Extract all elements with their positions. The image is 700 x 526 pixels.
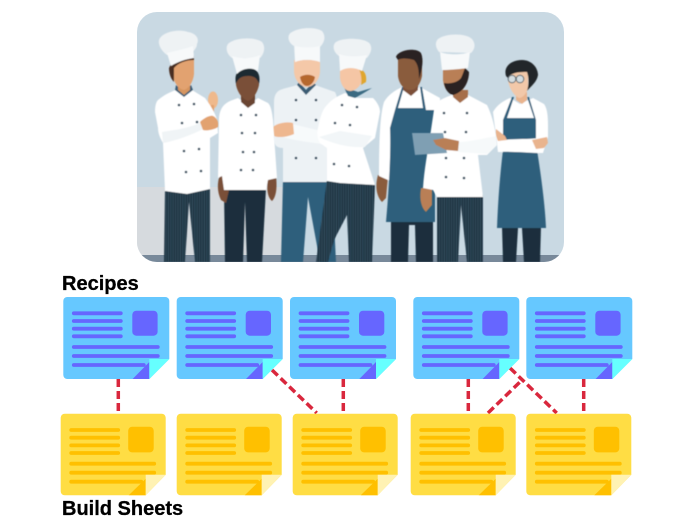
chef 3: bearded chef with crossed arms xyxy=(272,28,340,262)
build sheet 1 xyxy=(61,414,166,495)
build sheet 2 xyxy=(177,414,282,495)
build sheet 3 xyxy=(293,414,398,495)
chef 2: chef with arms at sides xyxy=(218,38,277,262)
wall background xyxy=(137,12,564,262)
build sheet 4 xyxy=(411,414,516,495)
heading: Recipes: Recipes xyxy=(62,273,139,295)
recipe card 3 xyxy=(290,297,396,379)
chef 5: cook in blue apron xyxy=(376,50,440,262)
chef 1: chef holding a wooden spoon xyxy=(155,31,218,262)
connector lines between recipes and build sheets xyxy=(118,368,584,413)
chef 6: bearded chef holding a tablet xyxy=(412,34,497,262)
recipe card 2 xyxy=(177,297,283,379)
lower wall panel xyxy=(137,187,287,257)
chef 4: blonde chef with scarf xyxy=(316,39,380,262)
recipe card 4 xyxy=(413,297,519,379)
glasses xyxy=(508,75,524,83)
build sheet 5 xyxy=(526,414,631,495)
heading: Build Sheets: Build Sheets xyxy=(62,498,183,520)
tablet xyxy=(412,133,447,155)
chef 7: cook with glasses and blue apron xyxy=(493,60,548,262)
recipe card 5 xyxy=(526,297,632,379)
floor xyxy=(137,255,564,262)
illustration: team of chefs xyxy=(137,12,564,262)
recipe card 1 xyxy=(63,297,169,379)
